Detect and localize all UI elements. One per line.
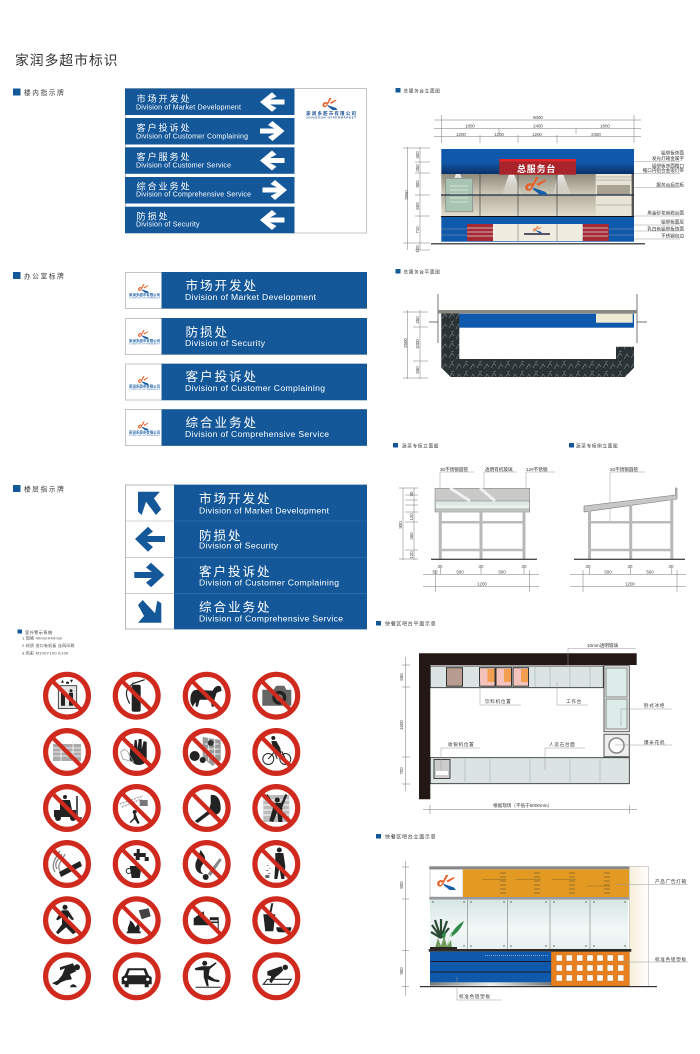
icon: no water on fire — [115, 899, 158, 942]
dimensions: left: 600 — [415, 202, 420, 210]
panel: vegetable cabinet front elevation — [393, 442, 555, 592]
office sign: customer complaining: 家润多超市有限公司 — [129, 384, 161, 388]
annotations: 檐口内铝合金嵌灯带 — [643, 167, 684, 174]
sign row: customer service — [125, 147, 294, 174]
sign row: customer complaining — [125, 118, 294, 144]
dimensions: bottom: 500 — [498, 570, 506, 574]
floor text: market development — [199, 491, 330, 515]
heading: counter elevation: 快餐区吧台立面示意 — [385, 834, 436, 840]
icon: no climbing — [255, 787, 298, 829]
dimensions: top: 1200 — [494, 132, 504, 137]
sign backing and logo — [126, 88, 366, 233]
dimensions: side bottom: 500 — [646, 570, 654, 574]
floor text: market development: 市场开发处 — [199, 491, 271, 506]
callouts: 饮料机位置 — [485, 698, 511, 705]
office sign: comprehensive service: JOINSOON HYPERMARKET — [129, 434, 161, 437]
dimensions: top: 1200 — [456, 132, 466, 137]
dimensions: side bottom: 500 — [604, 570, 612, 574]
floor text: customer complaining: Division of Customer Complaining — [199, 577, 339, 587]
sign backing and logo: 家润多超市有限公司 — [306, 110, 356, 117]
plant — [430, 919, 464, 950]
office sign: comprehensive service: 综合业务处 — [186, 415, 258, 430]
annotations: 发光灯箱金属字 — [652, 155, 684, 162]
dimensions: top: 2400 — [591, 132, 601, 137]
desk logo mark — [525, 177, 548, 195]
title: 家润多超市标识 — [15, 52, 119, 68]
office sign: market development: 市场开发处 — [186, 278, 258, 293]
cabinet frame — [431, 512, 537, 560]
panel: fast food counter plan — [376, 620, 672, 814]
callouts: 爆米花机 — [644, 739, 665, 746]
floor text: market development: Division of Market Development — [199, 505, 330, 515]
dimensions: top — [434, 115, 641, 143]
cabinet roof — [584, 488, 677, 512]
arrow: right — [134, 563, 164, 587]
icon: falling on mat — [255, 955, 298, 998]
sign row: customer complaining: Division of Customer Complaining — [136, 134, 248, 141]
panel: vegetable cabinet side elevation — [569, 442, 686, 592]
heading: indoor signs — [13, 88, 65, 97]
orange panel — [551, 952, 629, 986]
light box — [429, 866, 629, 900]
panel: warning sign notes — [18, 629, 75, 656]
plan wall — [429, 294, 647, 343]
dimensions: left — [403, 147, 430, 253]
callouts — [441, 642, 672, 770]
annotations: 不锈钢包边 — [661, 232, 684, 240]
icon: no stacking — [46, 731, 88, 773]
heading: service desk elevation: 总服务台立面图 — [404, 88, 441, 94]
dimensions: bottom: 500 — [456, 570, 464, 574]
office sign: market development: 家润多超市有限公司 — [129, 292, 161, 297]
dimensions: plan: 2500 — [403, 338, 408, 348]
heading: office signs — [13, 272, 65, 280]
dimensions: bottom: 30 — [438, 564, 443, 569]
dimensions: left: 900 — [399, 967, 404, 975]
icon: no head under — [185, 899, 228, 942]
heading: cabinet side elevation: 蔬菜专柜侧立面图 — [576, 442, 618, 450]
blue base — [430, 952, 551, 986]
icon: no touching — [115, 731, 158, 773]
heading: floor signs — [13, 484, 65, 494]
heading: floor signs: 楼层指示牌 — [24, 484, 65, 494]
cabinet top — [435, 488, 530, 512]
sign backing and logo: JOINSOON HYPERMARKET — [306, 116, 356, 120]
dimensions: left: 900 — [398, 521, 403, 529]
floor text: customer complaining: 客户投诉处 — [199, 564, 271, 579]
lower counter — [430, 758, 629, 784]
dimensions: top: 1800 — [465, 123, 475, 128]
dimensions: side bottom: 1200 — [625, 582, 635, 586]
floor text: comprehensive service: 综合业务处 — [199, 600, 271, 614]
icon: no fire — [185, 843, 228, 885]
annotations — [634, 150, 684, 240]
sign row: customer service: Division of Customer Service — [136, 162, 231, 169]
annotations: 铝塑板饰面 — [661, 150, 684, 156]
dimensions: left: 900 — [415, 180, 420, 188]
callout: 20不锈钢圆管 — [610, 466, 638, 473]
floor text: comprehensive service — [199, 600, 343, 623]
panel: warning sign notes: 3.色彩 M100Y100 K100 — [22, 650, 69, 656]
office sign: market development — [126, 272, 367, 308]
icon: trip hazard — [46, 955, 88, 998]
dimensions: left: 120 — [409, 551, 414, 559]
sign row: comprehensive service: Division of Comprehensive Service — [136, 192, 251, 199]
callouts: 12#不锈钢 — [526, 466, 548, 473]
annotations: 服务台后背柜 — [656, 182, 684, 188]
panel: service desk elevation — [396, 88, 684, 253]
dimensions: left: 710 — [415, 226, 420, 234]
annotations: 铝塑板面层 — [661, 218, 684, 226]
office sign: customer complaining — [126, 364, 367, 400]
dimensions: left: 360 — [409, 532, 414, 540]
heading: cabinet front elevation: 蔬菜专柜立面图 — [402, 442, 439, 450]
callouts: 10mm透明玻璃 — [587, 642, 619, 649]
icon: no pedestrians — [46, 899, 88, 942]
dimension: bottom: 根据现场（不低于5000mm） — [493, 802, 552, 809]
icon: no littering — [255, 843, 298, 885]
dimensions: left — [398, 488, 418, 560]
office sign: comprehensive service — [126, 409, 367, 446]
office sign: security: 家润多超市有限公司 — [129, 338, 161, 343]
dimensions: plan: 550 — [415, 366, 420, 374]
dimensions: left: 650 — [399, 673, 404, 681]
icon: no food and drink — [255, 899, 298, 942]
floor line — [431, 243, 645, 244]
callouts: 收银机位置 — [448, 741, 474, 748]
dimensions: left: 700 — [399, 767, 404, 775]
floor text: security: 防损处 — [199, 528, 242, 543]
arrow: up left — [138, 492, 161, 515]
dimensions: bottom: 30 — [522, 564, 527, 569]
callouts — [440, 466, 555, 512]
heading: service desk elevation — [396, 88, 441, 94]
callouts: 透明有机玻璃 — [485, 466, 513, 473]
icon: no operating switch — [185, 787, 228, 829]
office sign: comprehensive service: 家润多超市有限公司 — [129, 430, 161, 434]
office sign: security: Division of Security — [185, 338, 266, 348]
annotations: 铝塑板饰面檐口 — [652, 162, 684, 170]
dimensions: left: 100 — [415, 245, 420, 253]
callout — [610, 466, 645, 522]
icon: no hand near gears — [185, 731, 228, 773]
sign row: market development: Division of Market Development — [136, 105, 241, 112]
callouts: 人造石台面 — [549, 741, 575, 748]
sign row: customer service: 客户服务处 — [136, 151, 191, 162]
icon: no smoking — [46, 843, 88, 885]
panel: floor signs — [13, 484, 367, 629]
icon: no bicycles — [255, 731, 298, 773]
panel: indoor direction signs — [13, 88, 366, 233]
dimensions: plan: 1000 — [415, 339, 420, 349]
office sign: market development: JOINSOON HYPERMARKET — [129, 296, 161, 300]
callouts: 标准色铝塑板 — [459, 993, 491, 1000]
floor text: security: Division of Security — [199, 541, 279, 551]
dimensions: plan — [403, 310, 428, 379]
sign row: customer complaining: 客户投诉处 — [136, 122, 191, 133]
dimensions: left: 400 — [415, 151, 420, 159]
icon: no dogs — [185, 674, 228, 717]
office sign: customer complaining: Division of Customer Complaining — [185, 383, 325, 393]
heading: counter plan: 快餐区吧台平面示意 — [385, 620, 436, 628]
glass panels — [430, 900, 628, 949]
dimensions: side bottom: 30 — [628, 564, 633, 569]
cabinet side frame — [574, 499, 685, 560]
office sign: customer complaining: 客户投诉处 — [186, 369, 258, 384]
icon: no walking under load — [115, 787, 158, 829]
panel: fast food counter elevation — [376, 834, 688, 1000]
dimensions: bottom: 1200 — [477, 582, 487, 586]
floor sign backing — [125, 485, 367, 629]
sign row: market development: 市场开发处 — [136, 93, 191, 104]
office sign: security — [126, 318, 367, 354]
dimensions: left: 2850 — [404, 190, 409, 200]
desk sign: 总服务台 — [517, 163, 556, 174]
dimensions: bottom: 30 — [479, 564, 484, 569]
icon: car — [115, 955, 158, 998]
panel: warning sign notes: 1.规格 40mmX40mm — [22, 636, 63, 640]
panel: warning sign notes: 2.材质 进口有机板 丝网印刷 — [22, 643, 75, 648]
office sign: market development: Division of Market Development — [185, 292, 317, 302]
office sign: security: 防损处 — [186, 324, 229, 340]
office sign: comprehensive service: Division of Comprehensive Service — [185, 429, 329, 439]
sign row: comprehensive service: 综合业务处 — [136, 181, 191, 192]
dimensions: left: 120 — [409, 513, 414, 521]
dimensions: bottom — [423, 564, 539, 592]
dimensions: top: 6000 — [533, 115, 543, 120]
work counter — [430, 666, 603, 688]
sign row: security: 防损处 — [136, 210, 169, 222]
dimensions: left: 800 — [399, 881, 404, 889]
floor text: customer complaining — [199, 564, 339, 587]
floor text: security — [199, 528, 279, 551]
icon: no forklift — [46, 787, 88, 829]
callouts: 标准色铝塑板 — [655, 956, 687, 963]
desk upper fascia — [441, 149, 634, 174]
dimensions: left: 90 — [409, 491, 414, 496]
office sign: customer complaining: JOINSOON HYPERMARKET — [129, 388, 161, 391]
panel: prohibition icons — [46, 674, 298, 998]
arrow: down right — [138, 600, 161, 623]
dimensions: left — [399, 657, 410, 791]
dimensions: side bottom — [570, 564, 686, 592]
dimensions: side bottom: 30 — [669, 564, 674, 569]
dimensions: side bottom: 30 — [586, 564, 591, 569]
desk counter — [441, 216, 634, 242]
freezer — [604, 666, 629, 732]
sign row: security: Division of Security — [136, 222, 200, 229]
heading: office signs: 办公室标牌 — [24, 272, 65, 280]
callouts: 卧式冰柜 — [644, 702, 665, 709]
floor text: comprehensive service: Division of Comprehensive Service — [199, 613, 343, 623]
walls — [419, 653, 637, 799]
icon: no elevator — [46, 674, 88, 717]
dimensions: plan: 450 — [415, 316, 420, 324]
dimension: bottom — [423, 802, 637, 814]
dimensions: top: 1200 — [532, 132, 542, 137]
dimensions: left: 1600 — [399, 720, 404, 730]
callouts: 30不锈钢圆管 — [440, 466, 468, 473]
dimensions: bottom: 50 — [433, 570, 438, 574]
dimensions: top: 2400 — [533, 123, 543, 128]
dimensions: left: 350 — [415, 164, 420, 172]
heading: cabinet side elevation — [569, 442, 618, 450]
panel: office signs — [13, 272, 367, 446]
heading: service desk plan: 总服务台平面图 — [404, 268, 441, 276]
icon: no extinguisher — [115, 674, 158, 717]
floor line — [420, 986, 657, 987]
callouts: 工作台 — [566, 698, 582, 705]
sign row: comprehensive service — [125, 177, 294, 204]
annotations: 乳白色铝塑板饰面 — [647, 226, 684, 232]
panel: warning sign notes: 室外警示系统 — [25, 629, 53, 636]
heading: indoor signs: 楼内指示牌 — [24, 88, 65, 97]
callouts — [457, 878, 688, 1000]
rice cooker — [604, 734, 629, 757]
plan granite counter — [441, 314, 634, 377]
counter top — [429, 949, 631, 952]
dimensions: top: 1800 — [600, 123, 610, 128]
annotations: 黑金砂花岗岩台面 — [647, 210, 684, 216]
office sign: security: JOINSOON HYPERMARKET — [129, 342, 161, 346]
desk back wall — [441, 174, 634, 241]
cream wall — [629, 866, 648, 986]
dimensions: left — [399, 861, 409, 996]
panel: service desk plan — [396, 268, 647, 379]
sign row: market development — [125, 88, 294, 115]
icon: slippery floor — [185, 955, 228, 998]
arrow: left — [135, 527, 165, 552]
plan blue cabinet — [459, 314, 634, 328]
heading: service desk plan — [396, 268, 441, 276]
icon: no drinking water — [115, 843, 158, 885]
icon: no cameras — [255, 674, 298, 717]
heading: cabinet front elevation — [393, 442, 439, 450]
sign row: security — [125, 207, 294, 233]
desk sign — [499, 159, 576, 175]
callouts: 产品广告灯箱 — [655, 878, 687, 885]
